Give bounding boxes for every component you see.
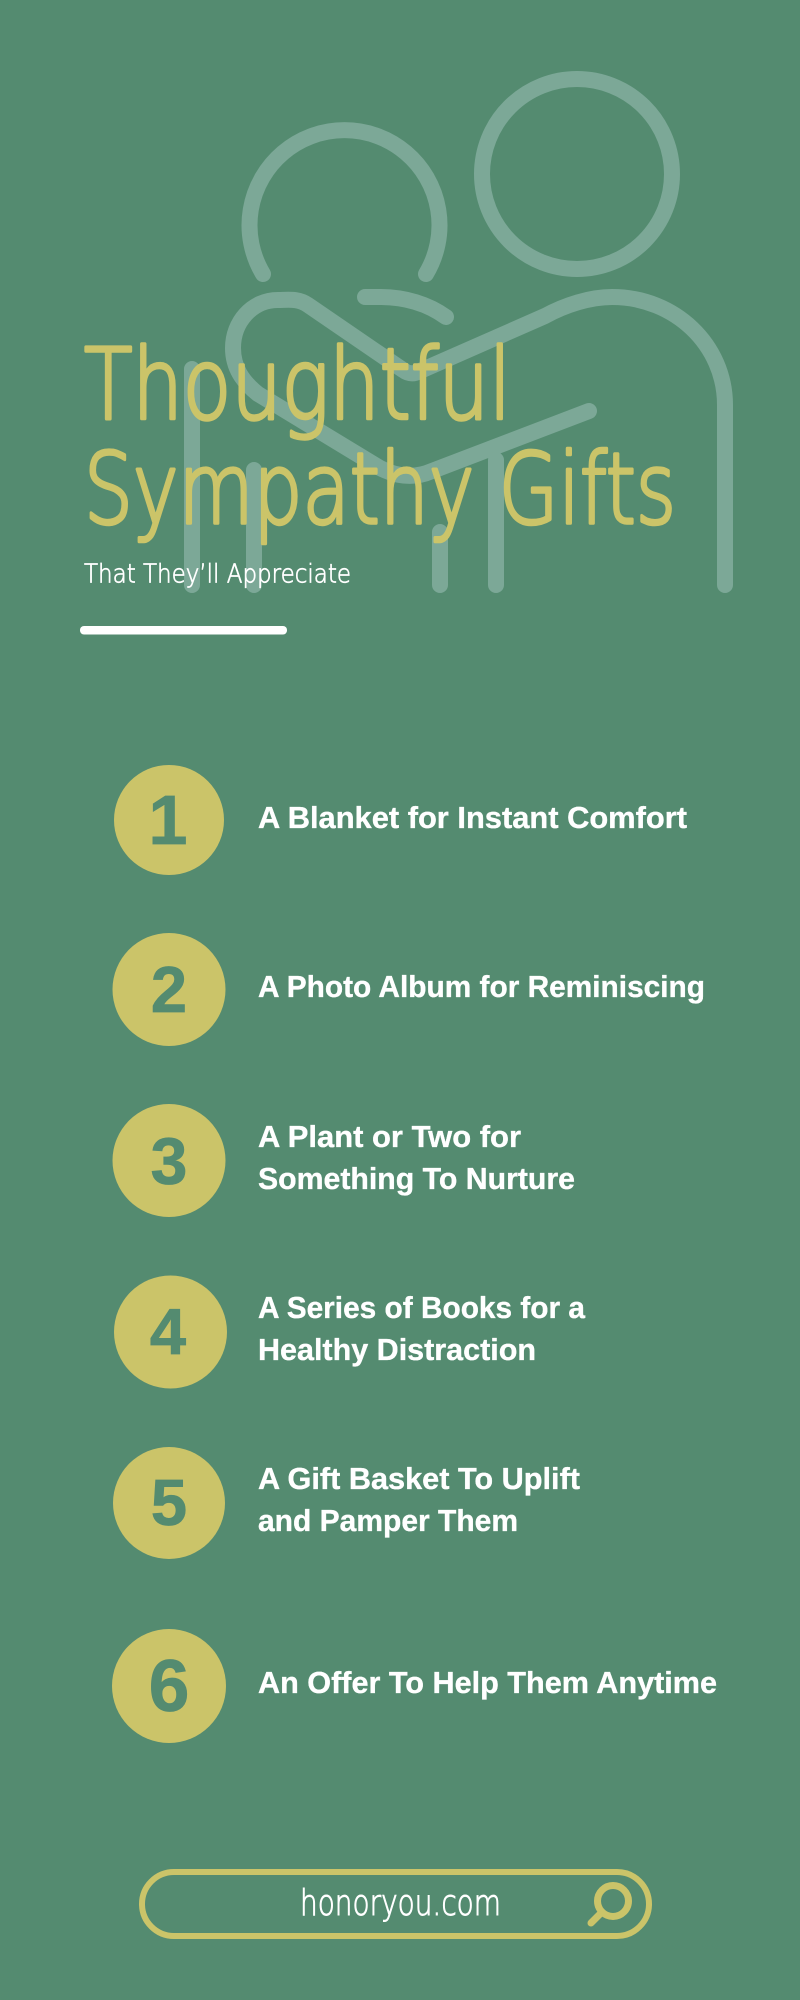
list item 5 (113, 1447, 580, 1559)
title: Thoughtful (84, 328, 511, 442)
list item 5: A Gift Basket To Uplift (258, 1462, 580, 1496)
list item 3: A Plant or Two for (258, 1120, 521, 1154)
list item 4: Healthy Distraction (258, 1333, 536, 1367)
list item 3: 3 (151, 1124, 187, 1198)
list item 6: 6 (149, 1646, 189, 1727)
list item 3 (112, 1104, 575, 1217)
search bar footer: honoryou.com (300, 1883, 501, 1924)
icon: magnifying glass (591, 1886, 628, 1923)
list item 1: A Blanket for Instant Comfort (258, 801, 687, 835)
list item 2: A Photo Album for Reminiscing (258, 970, 705, 1004)
list item 5: 5 (151, 1466, 187, 1539)
divider bar (80, 626, 287, 634)
list item 4 (114, 1276, 586, 1388)
list item 6 (112, 1629, 717, 1743)
list item 6: An Offer To Help Them Anytime (258, 1666, 717, 1700)
list item 2 (112, 933, 705, 1046)
subtitle: That They’ll Appreciate (84, 560, 351, 590)
list item 4: A Series of Books for a (258, 1291, 586, 1325)
list item 5: and Pamper Them (258, 1504, 518, 1538)
icon: two people embracing (192, 79, 725, 585)
list item 3: Something To Nurture (258, 1162, 575, 1196)
list item 4: 4 (150, 1295, 186, 1368)
title (84, 328, 676, 547)
search bar footer (142, 1872, 649, 1936)
list item 1: 1 (149, 781, 187, 859)
list item 1 (114, 765, 687, 875)
list item 2: 2 (151, 953, 187, 1026)
